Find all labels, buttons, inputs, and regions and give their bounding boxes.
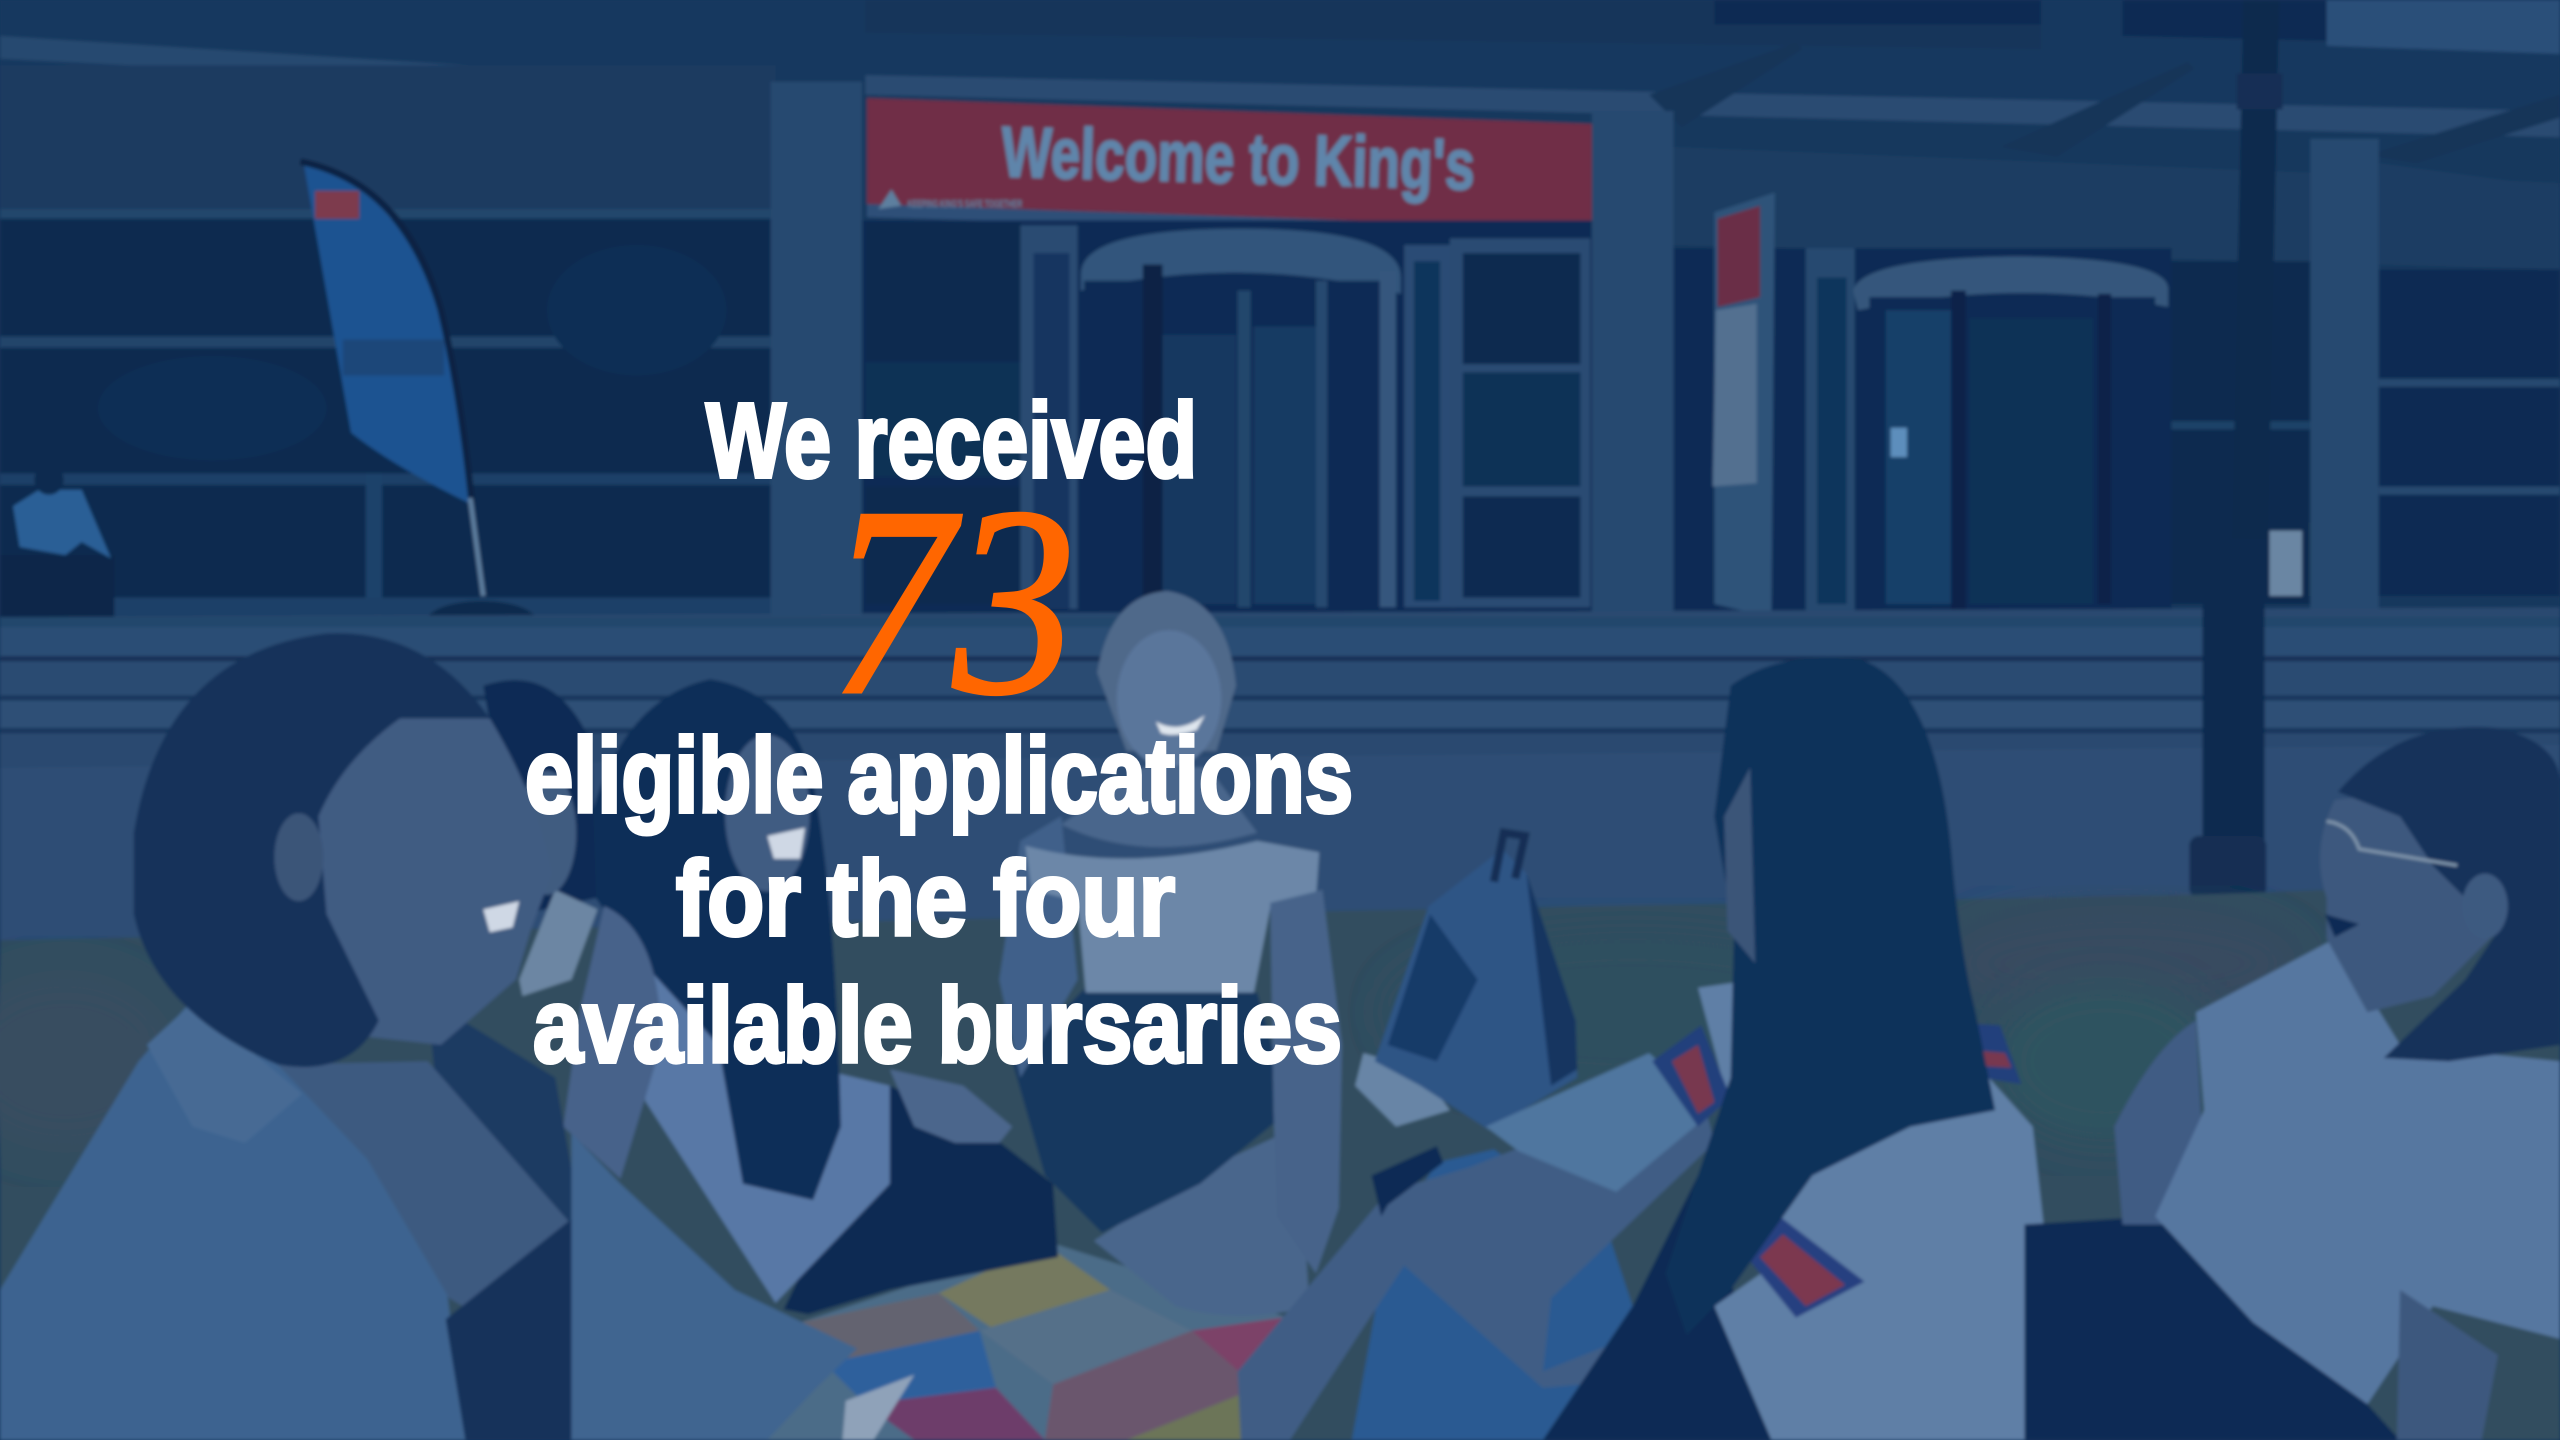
info board	[1713, 193, 1775, 617]
student: woman in foreground left	[0, 633, 914, 1440]
main entrance doors	[862, 220, 1592, 612]
red welcome sign: Welcome to King's	[1000, 112, 1476, 206]
line: available bursaries: available bursaries	[533, 967, 1342, 1085]
student: woman with glasses on right	[2025, 727, 2560, 1440]
line: eligible applications: eligible applications	[525, 717, 1353, 835]
column left	[771, 82, 862, 617]
student: blonde woman centre	[999, 591, 1450, 1316]
lamp post	[2189, 0, 2283, 898]
feather banner	[300, 162, 537, 643]
column centre	[1592, 111, 1674, 617]
entrance steps	[0, 607, 2560, 767]
red welcome sign	[867, 98, 1598, 238]
left windows	[0, 209, 780, 617]
student: woman with long dark hair	[580, 679, 1058, 1314]
grass lawn	[0, 882, 2560, 1440]
picnic blanket	[620, 1241, 1355, 1440]
building canopy and upper wall	[0, 0, 2560, 269]
column and right windows	[2310, 139, 2560, 612]
backpack	[1375, 833, 1577, 1130]
red welcome sign: KEEPING KING'S SAFE TOGETHER	[908, 198, 1022, 210]
right entrance doors	[1674, 248, 2351, 611]
student: woman with long hair seen from behind	[1238, 658, 2049, 1440]
headline text block	[525, 382, 1353, 1085]
person sitting by window	[0, 465, 114, 620]
line: for the four: for the four	[676, 840, 1175, 958]
paved forecourt	[0, 745, 2560, 944]
number: 73: 73	[830, 452, 1076, 751]
line: We received: We received	[706, 382, 1197, 500]
student: woman behind	[483, 680, 661, 1179]
